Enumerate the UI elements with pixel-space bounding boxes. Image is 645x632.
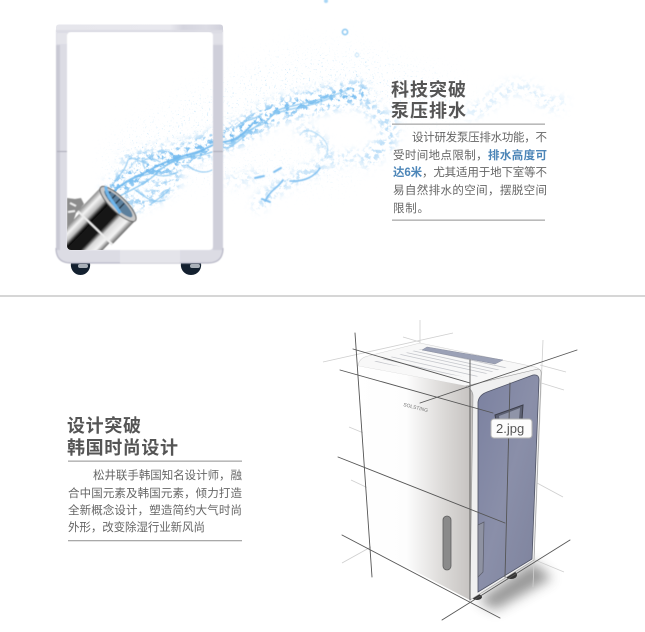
front water window: [443, 516, 451, 570]
heading: pump drainage: 科技突破: [391, 79, 466, 100]
text block: Korean design description: 合中国元素及韩国元素，倾力打造: [68, 486, 242, 500]
text block: pump drainage description: 受时间地点限制，排水高度可: [393, 148, 547, 162]
floor shadow: [478, 562, 552, 610]
text block: pump drainage description: 设计研发泵压排水功能，不: [412, 130, 548, 144]
side slot: [478, 522, 484, 577]
text block: Korean design description: [68, 468, 242, 534]
light construction lines: [323, 320, 566, 587]
wheels: [505, 571, 517, 579]
side handle: [495, 405, 523, 426]
side panel: [478, 375, 539, 592]
brand logo: SOLSTING: [403, 402, 429, 414]
water splash: [112, 0, 560, 205]
file name tooltip: 2.jpg: [496, 421, 524, 436]
steel pump nozzle: [67, 185, 138, 250]
section divider: [0, 295, 645, 297]
text block: pump drainage description: 达6米，尤其适用于地下室等不: [393, 165, 548, 179]
heading: Korean design: 韩国时尚设计: [67, 437, 178, 458]
file name tooltip: [491, 419, 532, 438]
top face: [358, 343, 541, 389]
frame: top strip: [56, 24, 223, 32]
top vents: [374, 349, 506, 376]
control panel: [422, 347, 503, 364]
side white trim: [466, 369, 541, 600]
wheel left: [71, 263, 90, 275]
heading: pump drainage: 泵压排水: [391, 101, 466, 121]
text block: Korean design description: 全新概念设计，塑造简约大气时尚: [68, 503, 242, 517]
frame: sides and bottom: [56, 30, 223, 263]
heading: Korean design: [67, 415, 178, 458]
front face: [358, 366, 473, 600]
text block: pump drainage description: 易自然排水的空间，摆脱空间: [393, 183, 547, 197]
dehumidifier with pump: product illustration: [51, 24, 223, 275]
heading: pump drainage: [391, 79, 466, 121]
dark construction lines: [338, 333, 577, 620]
text block: Korean design description: 松井联手韩国知名设计师，融: [93, 468, 242, 482]
heading: Korean design: 设计突破: [67, 415, 141, 436]
text block: pump drainage description: [393, 130, 548, 215]
dehumidifier sketch illustration: [323, 320, 577, 620]
text block: pump drainage description: 限制。: [393, 202, 429, 215]
wheel right: [181, 263, 201, 275]
text block: Korean design description: 外形，改变除湿行业新风尚: [68, 520, 205, 534]
